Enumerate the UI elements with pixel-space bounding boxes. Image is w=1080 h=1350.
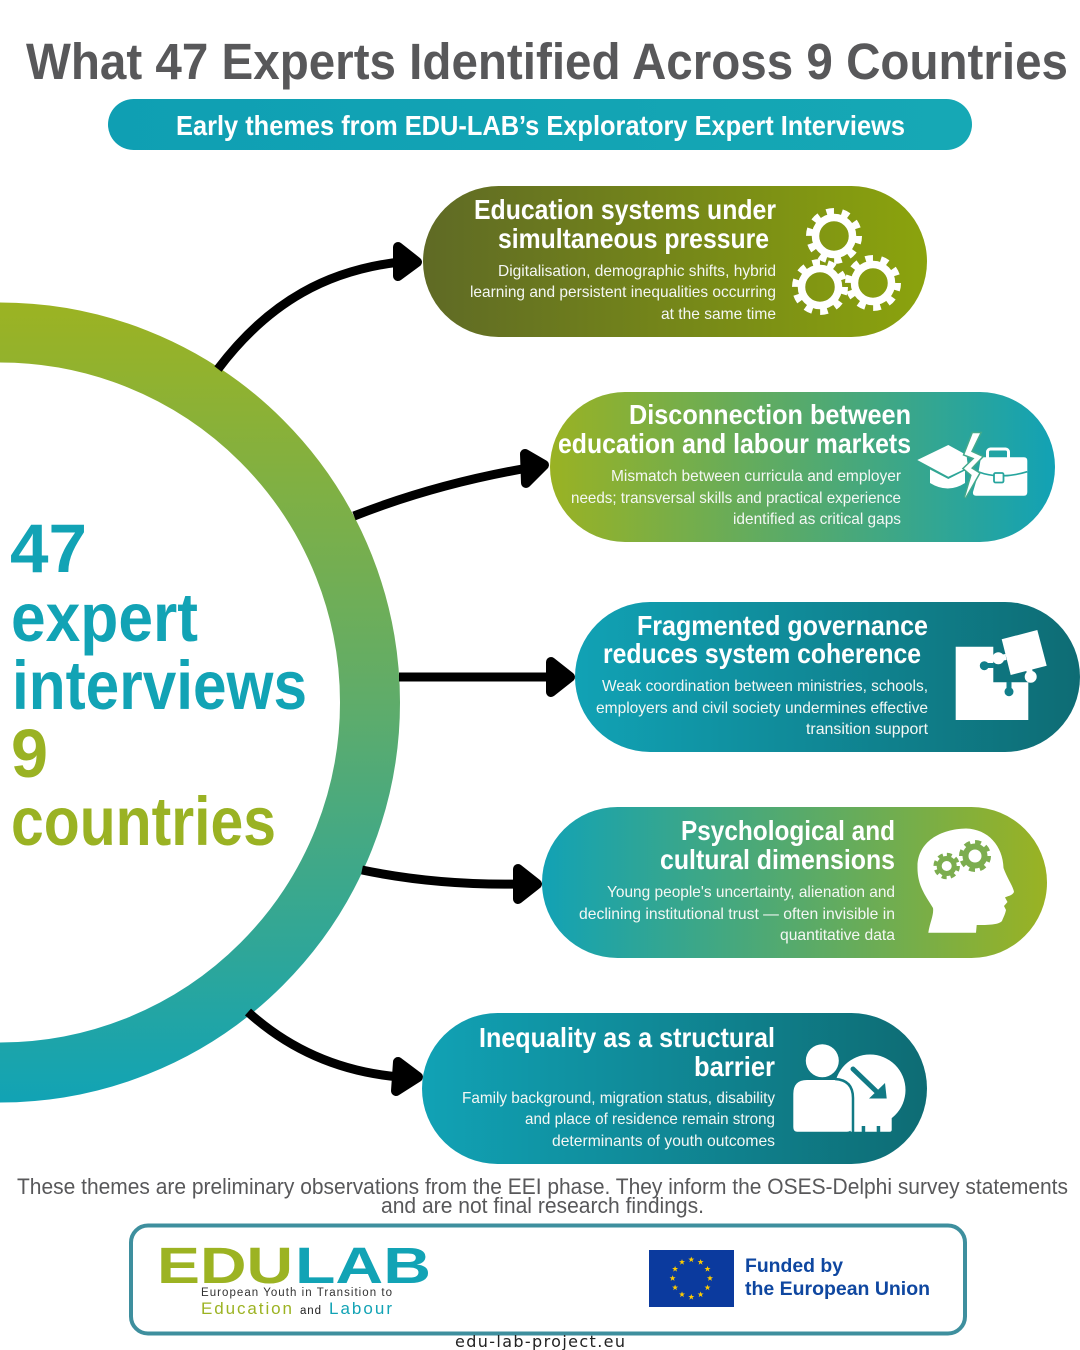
subtitle text: Early themes from EDU-LAB’s Exploratory Expert Interviews <box>176 110 905 141</box>
heading <box>660 815 895 875</box>
panel: psychological and cultural dimensions <box>542 807 1047 958</box>
central ring <box>0 332 370 1072</box>
body text: needs; transversal skills and practical experience <box>571 490 901 507</box>
heading <box>558 399 911 459</box>
body text <box>579 884 895 944</box>
body text: Young people's uncertainty, alienation and <box>607 884 895 901</box>
body text <box>596 678 929 738</box>
47: 47 <box>10 510 87 587</box>
arrow to theme 3 <box>399 662 570 692</box>
funding statement <box>745 1255 930 1300</box>
pill background <box>550 392 1055 542</box>
arrow to theme 2 <box>354 454 544 516</box>
heading: Disconnection between <box>629 399 911 430</box>
heading <box>474 194 776 254</box>
body text: determinants of youth outcomes <box>552 1133 775 1150</box>
logo: EDULAB: and <box>300 1305 321 1317</box>
heading <box>603 610 928 669</box>
heading: Inequality as a structural <box>479 1022 775 1053</box>
logo: EDULAB: LAB <box>295 1237 431 1294</box>
body text: learning and persistent inequalities occurring <box>470 284 776 301</box>
heading: Education systems under <box>474 194 776 225</box>
footer frame <box>131 1226 965 1334</box>
panel: inequality as a structural barrier <box>422 1013 927 1164</box>
heading: barrier <box>694 1051 775 1082</box>
arrow to theme 4 <box>362 869 537 899</box>
body text: and place of residence remain strong <box>525 1111 775 1128</box>
body text: quantitative data <box>780 927 895 944</box>
panel: disconnection between education and labour markets <box>550 392 1055 542</box>
subtitle pill <box>108 99 972 150</box>
countries: countries <box>11 783 276 860</box>
body text: employers and civil society undermines effective <box>596 700 928 717</box>
footnote text <box>17 1174 1068 1218</box>
arrow to theme 5 <box>248 1012 418 1091</box>
body text: at the same time <box>661 306 776 323</box>
heading: simultaneous pressure <box>498 223 769 254</box>
logo: EDULAB: Labour <box>329 1299 392 1318</box>
icon: puzzle pieces <box>956 630 1047 720</box>
funding statement: the European Union <box>745 1278 930 1300</box>
logo: EDULAB <box>157 1237 431 1318</box>
footer logo panel <box>131 1226 965 1334</box>
interviews: interviews <box>12 647 307 724</box>
body text: transition support <box>806 721 929 738</box>
body text: declining institutional trust — often invisible in <box>579 906 895 923</box>
9: 9 <box>11 715 48 792</box>
logo: EU flag <box>649 1250 734 1307</box>
pill background <box>423 186 927 337</box>
heading: education and labour markets <box>558 428 911 459</box>
logo: EDULAB: EDU <box>157 1237 293 1294</box>
arrow to theme 1 <box>218 247 417 369</box>
expert: expert <box>11 579 198 656</box>
heading: reduces system coherence <box>603 638 921 669</box>
subtitle banner <box>108 99 972 150</box>
panel: fragmented governance <box>575 602 1080 752</box>
body text <box>470 263 776 323</box>
body text: Weak coordination between ministries, schools, <box>602 678 928 695</box>
body text <box>462 1090 775 1150</box>
heading: cultural dimensions <box>660 844 895 875</box>
logo: EDULAB: Education <box>201 1299 292 1318</box>
icon: head with gears <box>917 828 1014 933</box>
body text: Digitalisation, demographic shifts, hybrid <box>498 263 776 280</box>
heading <box>479 1022 775 1082</box>
body text: Mismatch between curricula and employer <box>611 468 902 485</box>
pill background <box>422 1013 927 1164</box>
heading: Fragmented governance <box>637 610 928 641</box>
heading: Psychological and <box>681 815 895 846</box>
icon: person and declining arrow <box>793 1044 906 1132</box>
icon: gears <box>796 212 898 312</box>
key figures text <box>10 510 307 860</box>
body text: Family background, migration status, disability <box>462 1090 775 1107</box>
panel: education systems under pressure <box>423 186 927 337</box>
footnote text: and are not final research findings. <box>381 1193 704 1218</box>
body text <box>571 468 902 528</box>
pill background <box>575 602 1080 752</box>
logo: EDULAB: European Youth in Transition to <box>201 1287 392 1299</box>
pill background <box>542 807 1047 958</box>
icon: graduation cap and briefcase <box>917 433 1027 498</box>
body text: identified as critical gaps <box>733 511 901 528</box>
funding statement: Funded by <box>745 1255 843 1277</box>
